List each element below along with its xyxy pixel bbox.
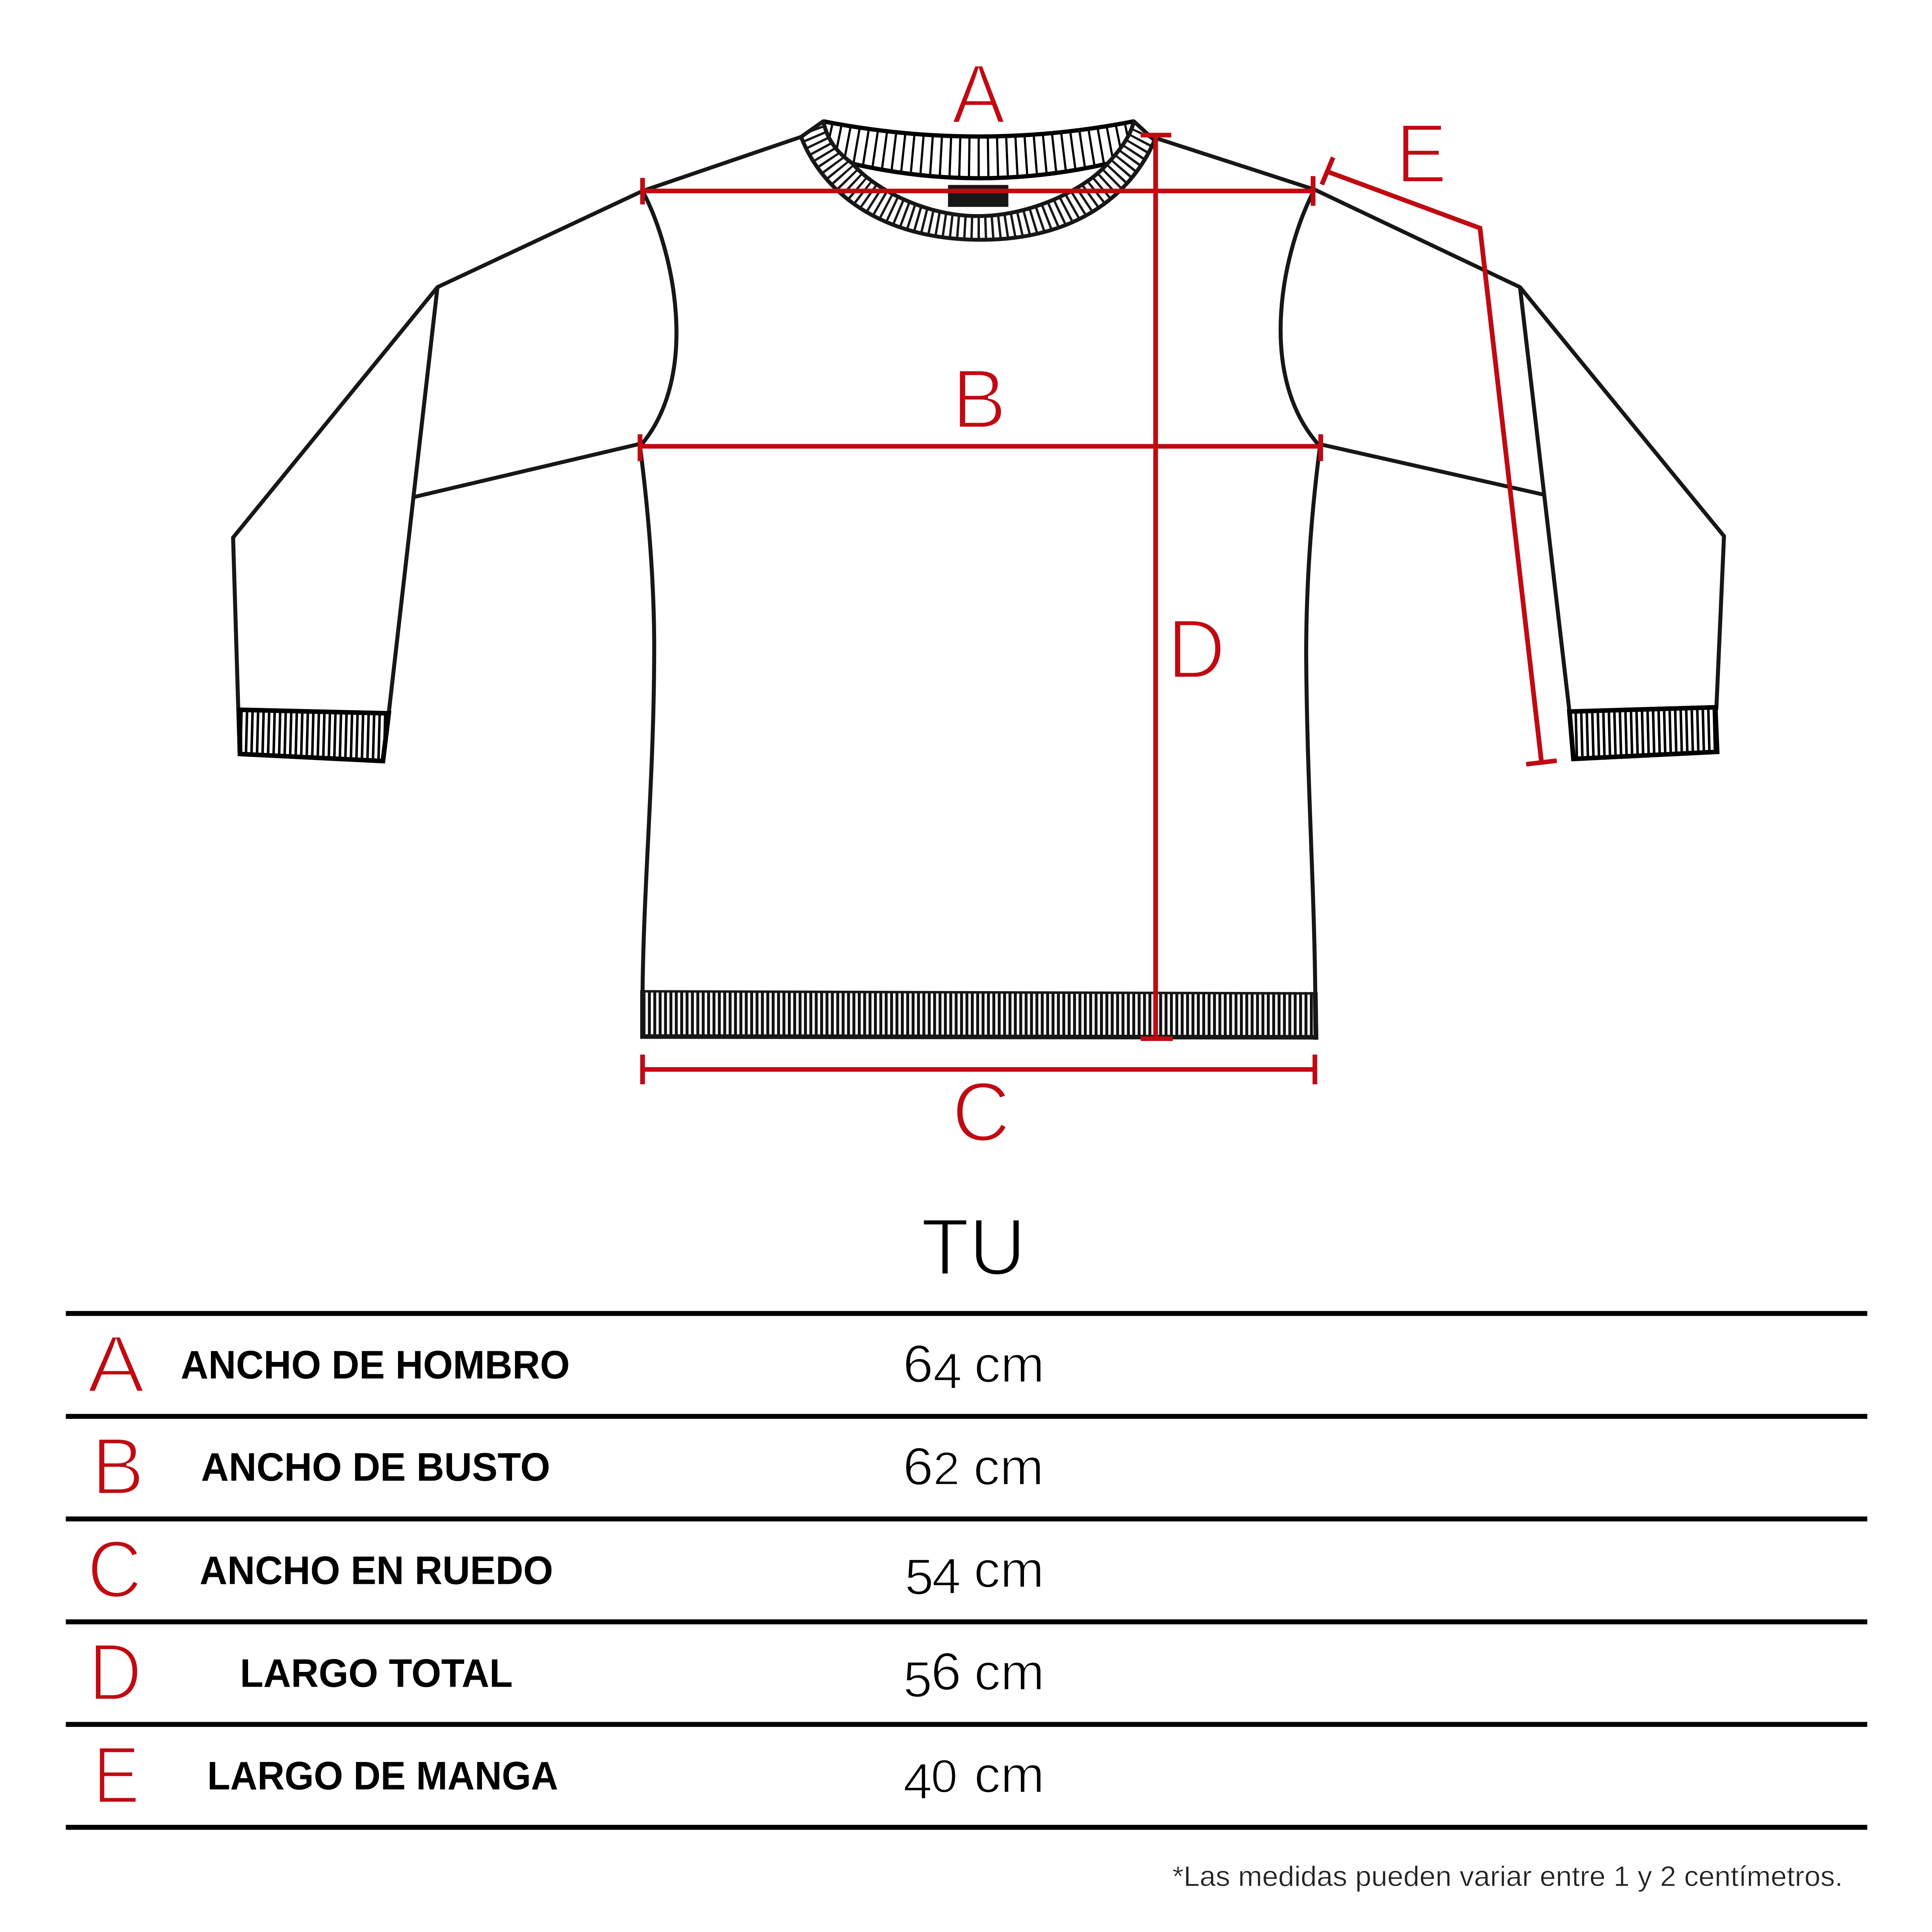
- row E value: 4: [903, 1753, 932, 1810]
- letter E: E: [1396, 106, 1447, 201]
- line B: [640, 434, 1321, 461]
- line E: [1322, 157, 1557, 764]
- left cuff: [240, 710, 389, 761]
- letter C: C: [952, 1065, 1010, 1159]
- row B value: 6: [903, 1437, 933, 1496]
- row B letter: B: [92, 1422, 145, 1512]
- row E letter: E: [93, 1730, 139, 1820]
- row C: [87, 1524, 1044, 1615]
- row A value: 6: [903, 1334, 933, 1393]
- bottom rule: [66, 1825, 1867, 1830]
- row C label: ANCHO EN RUEDO: [200, 1548, 553, 1593]
- rule: [66, 1517, 1867, 1521]
- line D: [1141, 135, 1173, 1039]
- row D value: 5: [903, 1651, 932, 1708]
- row D: [89, 1627, 1044, 1718]
- row E value: cm: [974, 1746, 1044, 1803]
- row D label: LARGO TOTAL: [240, 1651, 513, 1696]
- letter B: B: [952, 352, 1007, 446]
- row C value: 4: [932, 1548, 975, 1605]
- row A letter: A: [87, 1319, 145, 1410]
- row D letter: D: [89, 1627, 142, 1718]
- row A: [87, 1319, 1044, 1410]
- body and shoulders: [640, 137, 1320, 993]
- size heading: TU: [921, 1202, 1026, 1292]
- footnote: *Las medidas pueden variar entre 1 y 2 centímetros.: [1172, 1861, 1843, 1892]
- row B value: 2: [933, 1442, 973, 1495]
- row D value: cm: [974, 1643, 1044, 1701]
- right cuff: [1570, 707, 1717, 759]
- letter D: D: [1167, 602, 1225, 696]
- size table: [66, 1311, 1867, 1727]
- measurement lines: [640, 135, 1557, 1084]
- row D value: 6: [931, 1642, 976, 1701]
- diagram letters: [952, 47, 1447, 1159]
- neck label: [948, 185, 1009, 207]
- row A label: ANCHO DE HOMBRO: [181, 1343, 570, 1387]
- front neck rib: [801, 121, 1155, 240]
- hem rib: [640, 990, 1318, 1040]
- row C value: cm: [974, 1541, 1044, 1598]
- row E value: 0: [931, 1750, 971, 1802]
- row B value: cm: [973, 1438, 1044, 1496]
- right sleeve: [1315, 190, 1724, 711]
- row C value: 5: [905, 1549, 934, 1605]
- row B label: ANCHO DE BUSTO: [201, 1445, 550, 1490]
- row C letter: C: [87, 1524, 142, 1615]
- line A: [643, 176, 1313, 206]
- row A value: cm: [974, 1335, 1044, 1393]
- rule: [66, 1722, 1867, 1727]
- row B: [92, 1422, 1044, 1512]
- back neck rib: [818, 121, 1139, 178]
- row E: [93, 1730, 1044, 1820]
- row A value: 4: [933, 1343, 976, 1400]
- rule: [66, 1619, 1867, 1624]
- row E label: LARGO DE MANGA: [207, 1753, 558, 1798]
- rule: [66, 1414, 1867, 1419]
- line C: [643, 1054, 1315, 1084]
- top rule: [66, 1311, 1867, 1316]
- sweater drawing: [233, 121, 1724, 1040]
- left sleeve: [233, 191, 643, 754]
- letter A: A: [952, 47, 1005, 141]
